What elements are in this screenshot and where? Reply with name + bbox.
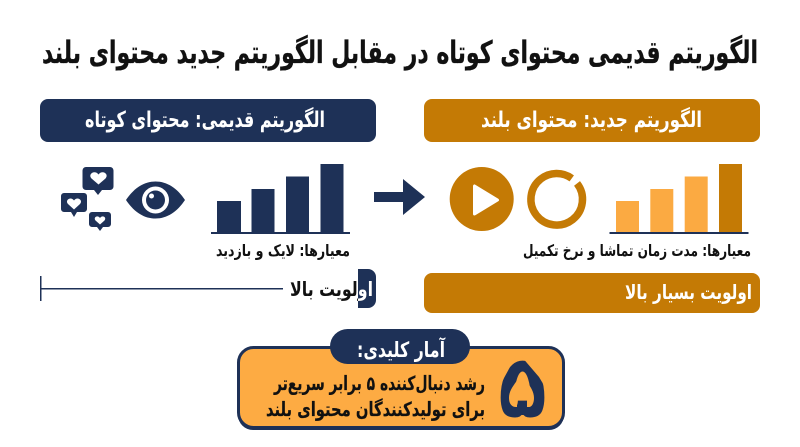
heading: old algorithm — [40, 99, 376, 142]
arrow — [374, 179, 425, 215]
priority: very high — [424, 273, 760, 313]
icon: eye — [126, 182, 185, 218]
text: old metrics: معیارها: لایک و بازدید — [216, 241, 350, 260]
panel: old algorithm — [40, 99, 376, 308]
text: stat description: رشد دنبال‌کننده ۵ برابر سریع‌تر — [273, 372, 485, 395]
priority: high: اولویت بالا — [290, 277, 373, 301]
number: five: ۵ — [498, 335, 547, 438]
priority: very high: اولویت بسیار بالا — [625, 280, 752, 304]
stat card — [238, 348, 564, 428]
icon: completion ring — [520, 163, 593, 236]
priority: high — [40, 269, 376, 308]
panel: key stats — [238, 329, 564, 438]
priority: high: اولویت بالا — [290, 277, 373, 301]
heading: old algorithm: الگوریتم قدیمی: محتوای کوتاه — [85, 106, 325, 133]
icon: play button — [450, 167, 514, 231]
heading: new algorithm — [424, 99, 760, 142]
bar chart: old algorithm — [211, 164, 350, 234]
heading: new algorithm: الگوریتم جدید: محتوای بلند — [481, 106, 702, 133]
icon: hearts in speech bubbles — [61, 167, 114, 231]
card bottom edge — [238, 413, 564, 430]
text: stat description: برای تولیدکنندگان محتوای بلند — [266, 398, 485, 421]
panel: new algorithm — [424, 99, 760, 313]
text: stat description — [266, 372, 485, 421]
badge: key stats — [330, 329, 470, 364]
badge: key stats: آمار کلیدی: — [357, 337, 446, 362]
bar chart: new algorithm — [610, 164, 748, 234]
